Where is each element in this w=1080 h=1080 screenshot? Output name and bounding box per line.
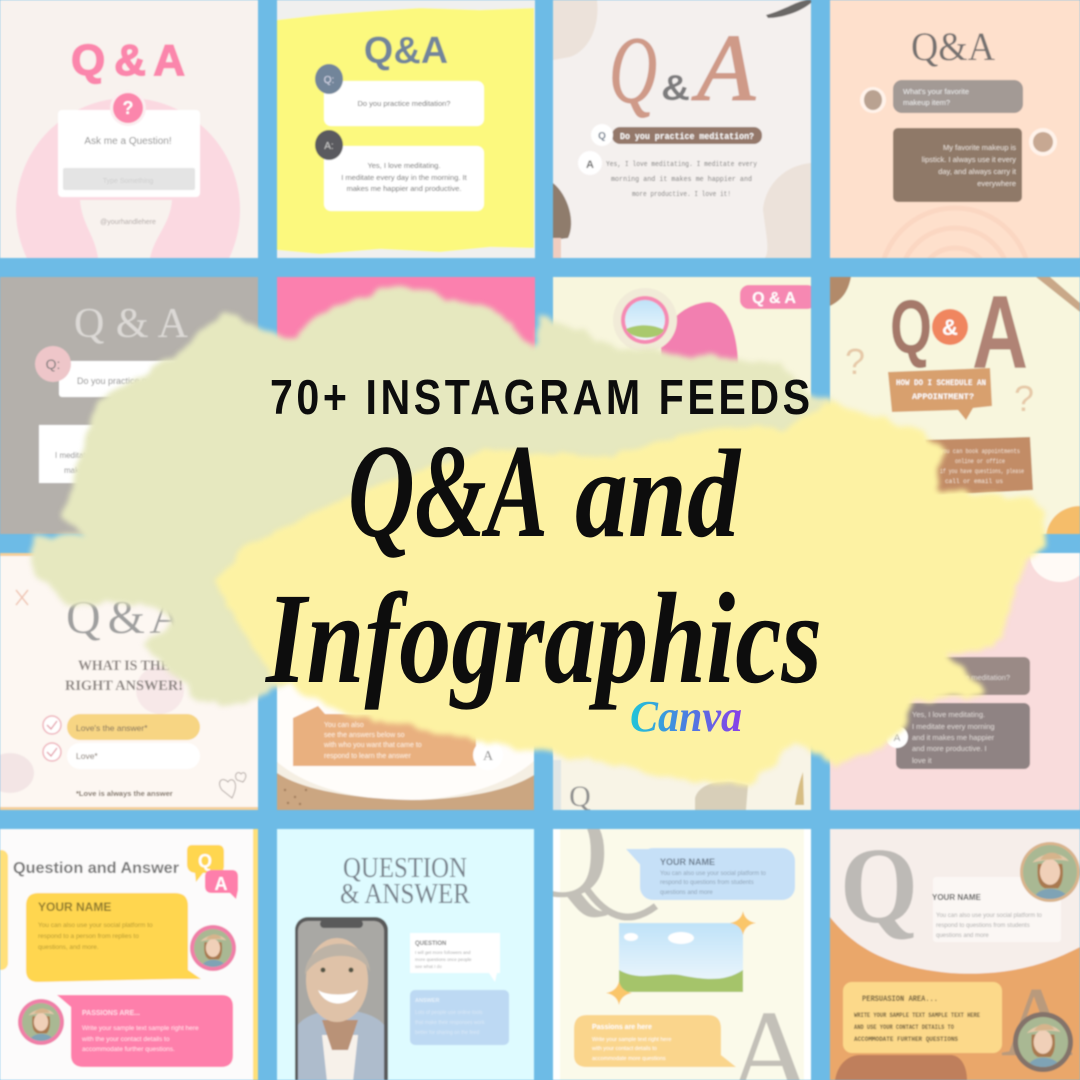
yellow box: PERSUASION AREA... bbox=[862, 994, 938, 1004]
orange bubble bbox=[574, 1015, 736, 1067]
letter Q: Q bbox=[514, 778, 610, 925]
answer bubble: and more productive. I bbox=[912, 744, 987, 753]
answer box bbox=[39, 425, 210, 483]
answer bubble: if you have questions, please bbox=[940, 468, 1024, 475]
answer bubble bbox=[893, 128, 1057, 202]
answer bubble: My favorite makeup is bbox=[943, 143, 1016, 152]
heading: Question and Answer bbox=[13, 860, 179, 877]
tag: Q & A bbox=[740, 285, 816, 309]
letter Q bbox=[514, 778, 656, 925]
answer bubble: you can book appointments bbox=[940, 448, 1020, 455]
answer option 1 bbox=[43, 714, 200, 740]
icon: Q A bubbles: A bbox=[214, 874, 228, 894]
panel: mint pink illustration bbox=[552, 276, 812, 400]
name card: You can also use your social platform to bbox=[936, 913, 1043, 919]
blue bubble: YOUR NAME bbox=[660, 857, 715, 867]
question bar bbox=[591, 124, 762, 146]
blue bubble bbox=[626, 848, 795, 900]
answer bubble: and it makes me happier bbox=[912, 733, 995, 742]
heading: brush Q & A: Q bbox=[609, 17, 657, 123]
answer note: Lots of people use online tools bbox=[415, 1010, 483, 1016]
heading: Q & A: A bbox=[972, 275, 1028, 391]
icon: question badge bbox=[110, 90, 146, 126]
question bubble bbox=[943, 656, 1031, 696]
answer bubble: Yes, I love meditating. bbox=[367, 161, 441, 170]
heading: Q & A: Q bbox=[890, 285, 932, 370]
answer box: makes me happier. bbox=[64, 466, 132, 475]
answer option 2: Love* bbox=[76, 751, 98, 761]
title: 70+ Instagram Feeds: 70+ INSTAGRAM FEEDS bbox=[270, 370, 810, 425]
landscape picture bbox=[619, 923, 743, 992]
footnote: *Love is always the answer bbox=[76, 789, 173, 798]
question bubble: makeup item? bbox=[903, 98, 950, 107]
orange bubble: Passions are here bbox=[592, 1024, 652, 1031]
name card: questions and more bbox=[936, 933, 989, 939]
avatar bbox=[1013, 1012, 1073, 1072]
heading: Q & A bbox=[891, 295, 1026, 369]
question bubble: Do you practice meditation? bbox=[358, 99, 450, 108]
answer bubble bbox=[315, 130, 484, 211]
heading: Q&A: Q&A bbox=[364, 30, 448, 72]
question row: Q: bbox=[46, 356, 60, 372]
answer text: Yes, I love meditating. I meditate every bbox=[606, 161, 757, 169]
orange note: see the answers below so bbox=[324, 732, 405, 739]
answer bubble: lipstick. I always use it every bbox=[922, 155, 1016, 164]
panel: landscape picture Q&A bbox=[514, 778, 814, 1080]
icon: hearts bbox=[220, 773, 246, 798]
panel: pink chat bbox=[830, 528, 1080, 810]
answer note bbox=[410, 990, 509, 1045]
icon: Q A bubbles bbox=[187, 845, 238, 899]
paint swash: olive bbox=[31, 287, 830, 705]
icons: question marks: ? bbox=[845, 341, 865, 382]
heading: Q & A: Q & A bbox=[71, 36, 185, 85]
panel: grey Q&A bbox=[0, 277, 258, 534]
answer bubble bbox=[886, 703, 1030, 769]
answer box: I meditate every morning and it bbox=[55, 451, 166, 460]
pink answer bubble: with the your contact details to bbox=[81, 1036, 170, 1043]
answer bubble: I meditate every morning bbox=[912, 722, 995, 731]
question bubble: APPOINTMENT? bbox=[912, 393, 974, 402]
panel: brush lettered Q&A bbox=[553, 0, 811, 258]
pink answer bubble: PASSIONS ARE... bbox=[82, 1010, 140, 1017]
icon: question badge: ? bbox=[122, 98, 134, 118]
panel: pink header bbox=[277, 277, 535, 534]
question bar: Q bbox=[598, 131, 606, 142]
question bubble bbox=[888, 368, 992, 420]
heading: Q & A: Q & A bbox=[66, 591, 184, 644]
yellow answer bubble: respond to a person from replies to bbox=[38, 933, 139, 940]
answer bubble: online or office bbox=[955, 458, 1005, 465]
answer bubble: day, and always carry it bbox=[938, 167, 1017, 176]
question note: QUESTION bbox=[415, 941, 446, 947]
question note: see what I do bbox=[415, 964, 442, 969]
icon: A badge bbox=[472, 746, 493, 764]
answer bubble: everywhere bbox=[977, 179, 1016, 188]
blue bubble: respond to questions from students bbox=[660, 880, 754, 886]
orange bubble: Write your sample text right here bbox=[592, 1037, 671, 1043]
yellow box: WRITE YOUR SAMPLE TEXT SAMPLE TEXT HERE bbox=[854, 1012, 980, 1020]
answer bubble: call or email us bbox=[945, 478, 1003, 485]
orange bubble: accommodate more questions bbox=[592, 1056, 666, 1062]
pink answer bubble bbox=[57, 995, 233, 1067]
name card: YOUR NAME bbox=[932, 893, 982, 902]
answer box: Yes, I love meditating. bbox=[88, 436, 166, 445]
title: Q&A and: Q&A bbox=[348, 417, 548, 565]
subheading bbox=[65, 660, 182, 691]
answer option 1: Love's the answer* bbox=[76, 723, 148, 733]
panel: question and answer with speech bubbles bbox=[0, 829, 258, 1080]
yellow box: ACCOMMODATE FURTHER QUESTIONS bbox=[854, 1036, 958, 1044]
orange note: respond to learn the answer bbox=[324, 753, 411, 760]
paint swash: yellow bbox=[214, 401, 1048, 785]
question card: Type Something bbox=[103, 178, 153, 185]
heading: brush Q & A bbox=[612, 35, 757, 119]
panel: white circle with orange box bbox=[276, 682, 535, 811]
answer bubble: Yes, I love meditating. bbox=[912, 710, 985, 719]
side label: Q bbox=[569, 780, 591, 813]
answer text bbox=[578, 151, 757, 199]
panel: brown Q&A bbox=[830, 275, 1080, 534]
avatar bbox=[18, 999, 64, 1045]
answer option 2 bbox=[43, 743, 200, 769]
panel: cream with small Q bbox=[552, 740, 812, 811]
icons: question marks: ? bbox=[1014, 378, 1034, 419]
pink answer bubble: Write your sample text sample right here bbox=[82, 1025, 199, 1032]
answer note: that make their responses work bbox=[415, 1020, 485, 1026]
question bar: Do you practice meditation? bbox=[620, 131, 754, 142]
panel: what is the right answer bbox=[0, 553, 258, 810]
name card bbox=[932, 877, 1061, 942]
pink shape with round photo bbox=[613, 288, 738, 365]
letter A: A bbox=[1001, 966, 1073, 1077]
yellow box: AND USE YOUR CONTACT DETAILS TO bbox=[854, 1024, 954, 1032]
title: Infographics: Infographics bbox=[264, 567, 822, 711]
avatar bbox=[1020, 842, 1080, 902]
orange note bbox=[293, 706, 476, 766]
panel: yellow torn paper Q&A bbox=[277, 0, 535, 258]
answer bubble: A: bbox=[324, 141, 334, 152]
blue bubble: You can also use your social platform to bbox=[660, 871, 767, 877]
answer bubble bbox=[925, 437, 1033, 496]
question bubble: Do you practice meditation? bbox=[917, 673, 1010, 682]
question row bbox=[35, 346, 217, 397]
panel: peach chat Q&A bbox=[829, 0, 1080, 259]
question bubble bbox=[315, 64, 484, 126]
answer bubble: love it bbox=[912, 756, 933, 765]
icon: Q A bubbles: Q bbox=[198, 851, 212, 871]
icon: A badge: A bbox=[483, 749, 494, 764]
panel: phone question and answer bbox=[277, 829, 534, 1080]
question bubble: What's your favorite bbox=[903, 87, 969, 96]
heading: Q & A: Q & A bbox=[74, 301, 189, 347]
answer text: morning and it makes me happier and bbox=[611, 176, 752, 184]
answer note: better for sharing on the feed bbox=[415, 1030, 479, 1036]
blue bubble: questions and more bbox=[660, 890, 713, 896]
heading: QUESTION bbox=[343, 853, 467, 884]
icons: question marks bbox=[846, 348, 1034, 412]
question note bbox=[410, 933, 500, 982]
question bubble: Q: bbox=[324, 75, 334, 86]
phone with portrait bbox=[295, 917, 388, 1080]
logo: Canva: Canva bbox=[630, 692, 742, 741]
question card: Ask me a Question! bbox=[84, 136, 172, 147]
heading bbox=[340, 853, 470, 910]
yellow answer bubble: YOUR NAME bbox=[38, 900, 111, 914]
answer note: ANSWER bbox=[415, 998, 439, 1004]
name card: respond to questions from students bbox=[936, 923, 1030, 929]
question bubble bbox=[860, 80, 1023, 113]
question note: more questions once people bbox=[415, 957, 472, 962]
yellow answer bubble: questions, and more. bbox=[38, 944, 99, 951]
answer bubble: A bbox=[894, 733, 901, 744]
orange note: with who you want that came to bbox=[323, 742, 422, 749]
question card bbox=[58, 110, 200, 197]
subheading: RIGHT ANSWER! bbox=[65, 678, 183, 694]
yellow answer bubble bbox=[26, 893, 201, 982]
question bubble: HOW DO I SCHEDULE AN bbox=[896, 379, 986, 388]
orange note: You can also bbox=[324, 722, 364, 729]
question note: I will get more followers and bbox=[415, 950, 471, 955]
heading: brush Q & A: A bbox=[691, 15, 756, 121]
panel: pink ask me a question bbox=[0, 0, 259, 259]
answer text: more productive. I love it! bbox=[632, 191, 731, 199]
answer text: A bbox=[586, 159, 594, 171]
handle: @yourhandlehere bbox=[100, 219, 156, 226]
yellow box bbox=[843, 982, 1002, 1053]
title: Q&A and: and bbox=[575, 425, 742, 564]
avatar bbox=[190, 925, 236, 971]
tag: Q & A: Q & A bbox=[752, 290, 796, 307]
orange bubble: with your contact details to bbox=[591, 1046, 657, 1052]
letter Q: Q bbox=[840, 827, 918, 946]
heading: Q&A: Q&A bbox=[911, 24, 995, 69]
heading: brush Q & A: & bbox=[661, 67, 690, 108]
yellow answer bubble: You can also use your social platform to bbox=[38, 922, 153, 929]
heading: Q & A: & bbox=[942, 315, 958, 340]
question row: Do you practice meditation? bbox=[77, 376, 189, 386]
answer bubble: I meditate every day in the morning. It bbox=[341, 173, 468, 182]
subheading: WHAT IS THE bbox=[78, 658, 170, 674]
panel: orange Q&A with avatars bbox=[830, 827, 1080, 1080]
icon: stars bbox=[606, 911, 756, 1005]
answer bubble: makes me happier and productive. bbox=[346, 184, 462, 193]
pink answer bubble: accommodate further questions. bbox=[82, 1046, 175, 1053]
heading: & ANSWER bbox=[340, 879, 470, 910]
